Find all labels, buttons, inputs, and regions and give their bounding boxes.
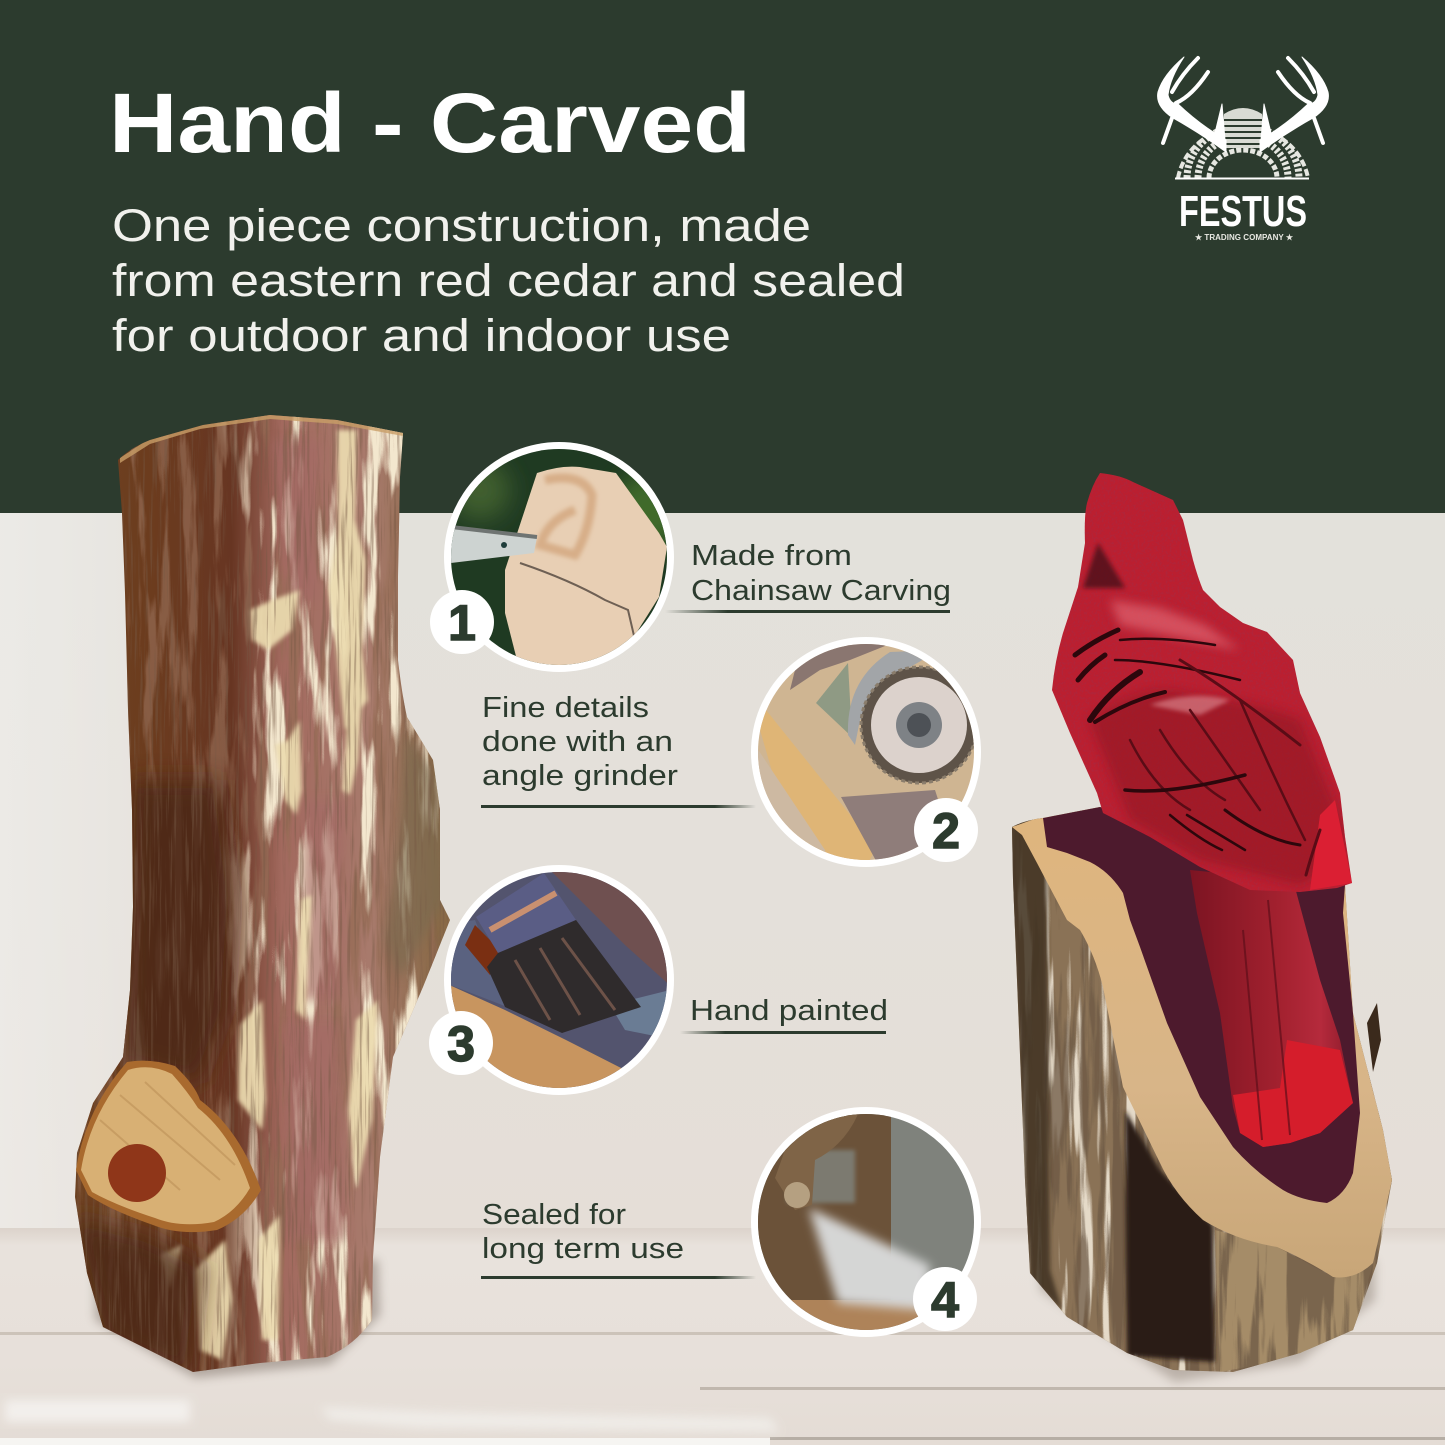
cardinal carved feathers (1075, 630, 1320, 875)
step 4 label (482, 1199, 684, 1265)
step 1 number badge (430, 590, 494, 654)
stump (1005, 805, 1400, 1382)
carved cardinal on stump photo (1005, 465, 1400, 1382)
stump stray bark fibres (1367, 1003, 1381, 1072)
title: Hand - Carved (109, 76, 751, 170)
stump dark bark patch (1125, 1110, 1215, 1362)
step 1 label: Made from (691, 540, 852, 572)
step 2 label: angle grinder (482, 760, 678, 792)
step 1 photo: chainsaw carving (444, 442, 688, 672)
log cut knot (76, 1061, 261, 1232)
step 3 number badge: 3 (447, 1016, 475, 1072)
step 4 number badge (913, 1267, 977, 1331)
log mauve bark patches (272, 440, 345, 1240)
step 2 photo: angle grinder (751, 637, 981, 868)
cardinal tail (1190, 870, 1353, 1147)
stump cut face tan rim (1012, 805, 1392, 1277)
subtitle: from eastern red cedar and sealed (112, 255, 905, 306)
subtitle (112, 200, 905, 361)
step 2 label: done with an (482, 726, 673, 758)
logo: turkey fan (1175, 108, 1309, 178)
top dark green header band (0, 0, 1445, 513)
step 3 photo: hand painted with brush (444, 865, 675, 1097)
step 2 label (482, 692, 678, 792)
step 1 number badge: 1 (448, 595, 476, 651)
step 4 label: long term use (482, 1233, 684, 1265)
step 3 connector line (680, 1031, 886, 1034)
step 3 number badge (429, 1011, 493, 1075)
stump heartwood purple (1043, 806, 1360, 1203)
cardinal body and head (1045, 465, 1360, 895)
step 1 label: Chainsaw Carving (691, 575, 951, 607)
log shadow (95, 1260, 380, 1378)
cardinal pale highlights (1110, 600, 1240, 650)
step 2 label: Fine details (482, 692, 649, 724)
cardinal dark chest marking (1083, 543, 1125, 588)
stump lower right sapwood (1215, 1230, 1373, 1372)
cardinal tail bright tip (1233, 1040, 1353, 1147)
cardinal bright tail base tip (1310, 800, 1352, 890)
step 1 label (691, 540, 951, 607)
logo: Festus Trading Company (1158, 57, 1328, 242)
logo: antlers (1158, 57, 1328, 152)
logo: tagline: ★ TRADING COMPANY ★ (1195, 233, 1294, 242)
log dark left shade (70, 780, 235, 1380)
step 4 label: Sealed for (482, 1199, 626, 1231)
log grey-brown branch stub on right (385, 730, 445, 980)
stump dark left bark strip (1008, 820, 1062, 1310)
subtitle: for outdoor and indoor use (112, 310, 731, 361)
log pale sapwood streaks (160, 430, 378, 1360)
background wall (0, 513, 1445, 1233)
step 2 number badge (914, 798, 978, 862)
step 2 number badge: 2 (932, 803, 960, 859)
step 4 number badge: 4 (931, 1272, 959, 1328)
cedar log photo (70, 410, 455, 1380)
logo: wordmark: FESTUS (1179, 188, 1307, 236)
step 1 connector line (665, 610, 950, 613)
step 4 photo: spray sealing (751, 1107, 981, 1340)
cardinal darker wing block (1090, 691, 1345, 885)
background floor (0, 1228, 1445, 1445)
step 3 label: Hand painted (690, 995, 888, 1027)
step 2 connector line (481, 805, 756, 808)
subtitle: One piece construction, made (112, 200, 811, 251)
step 4 connector line (481, 1276, 756, 1279)
